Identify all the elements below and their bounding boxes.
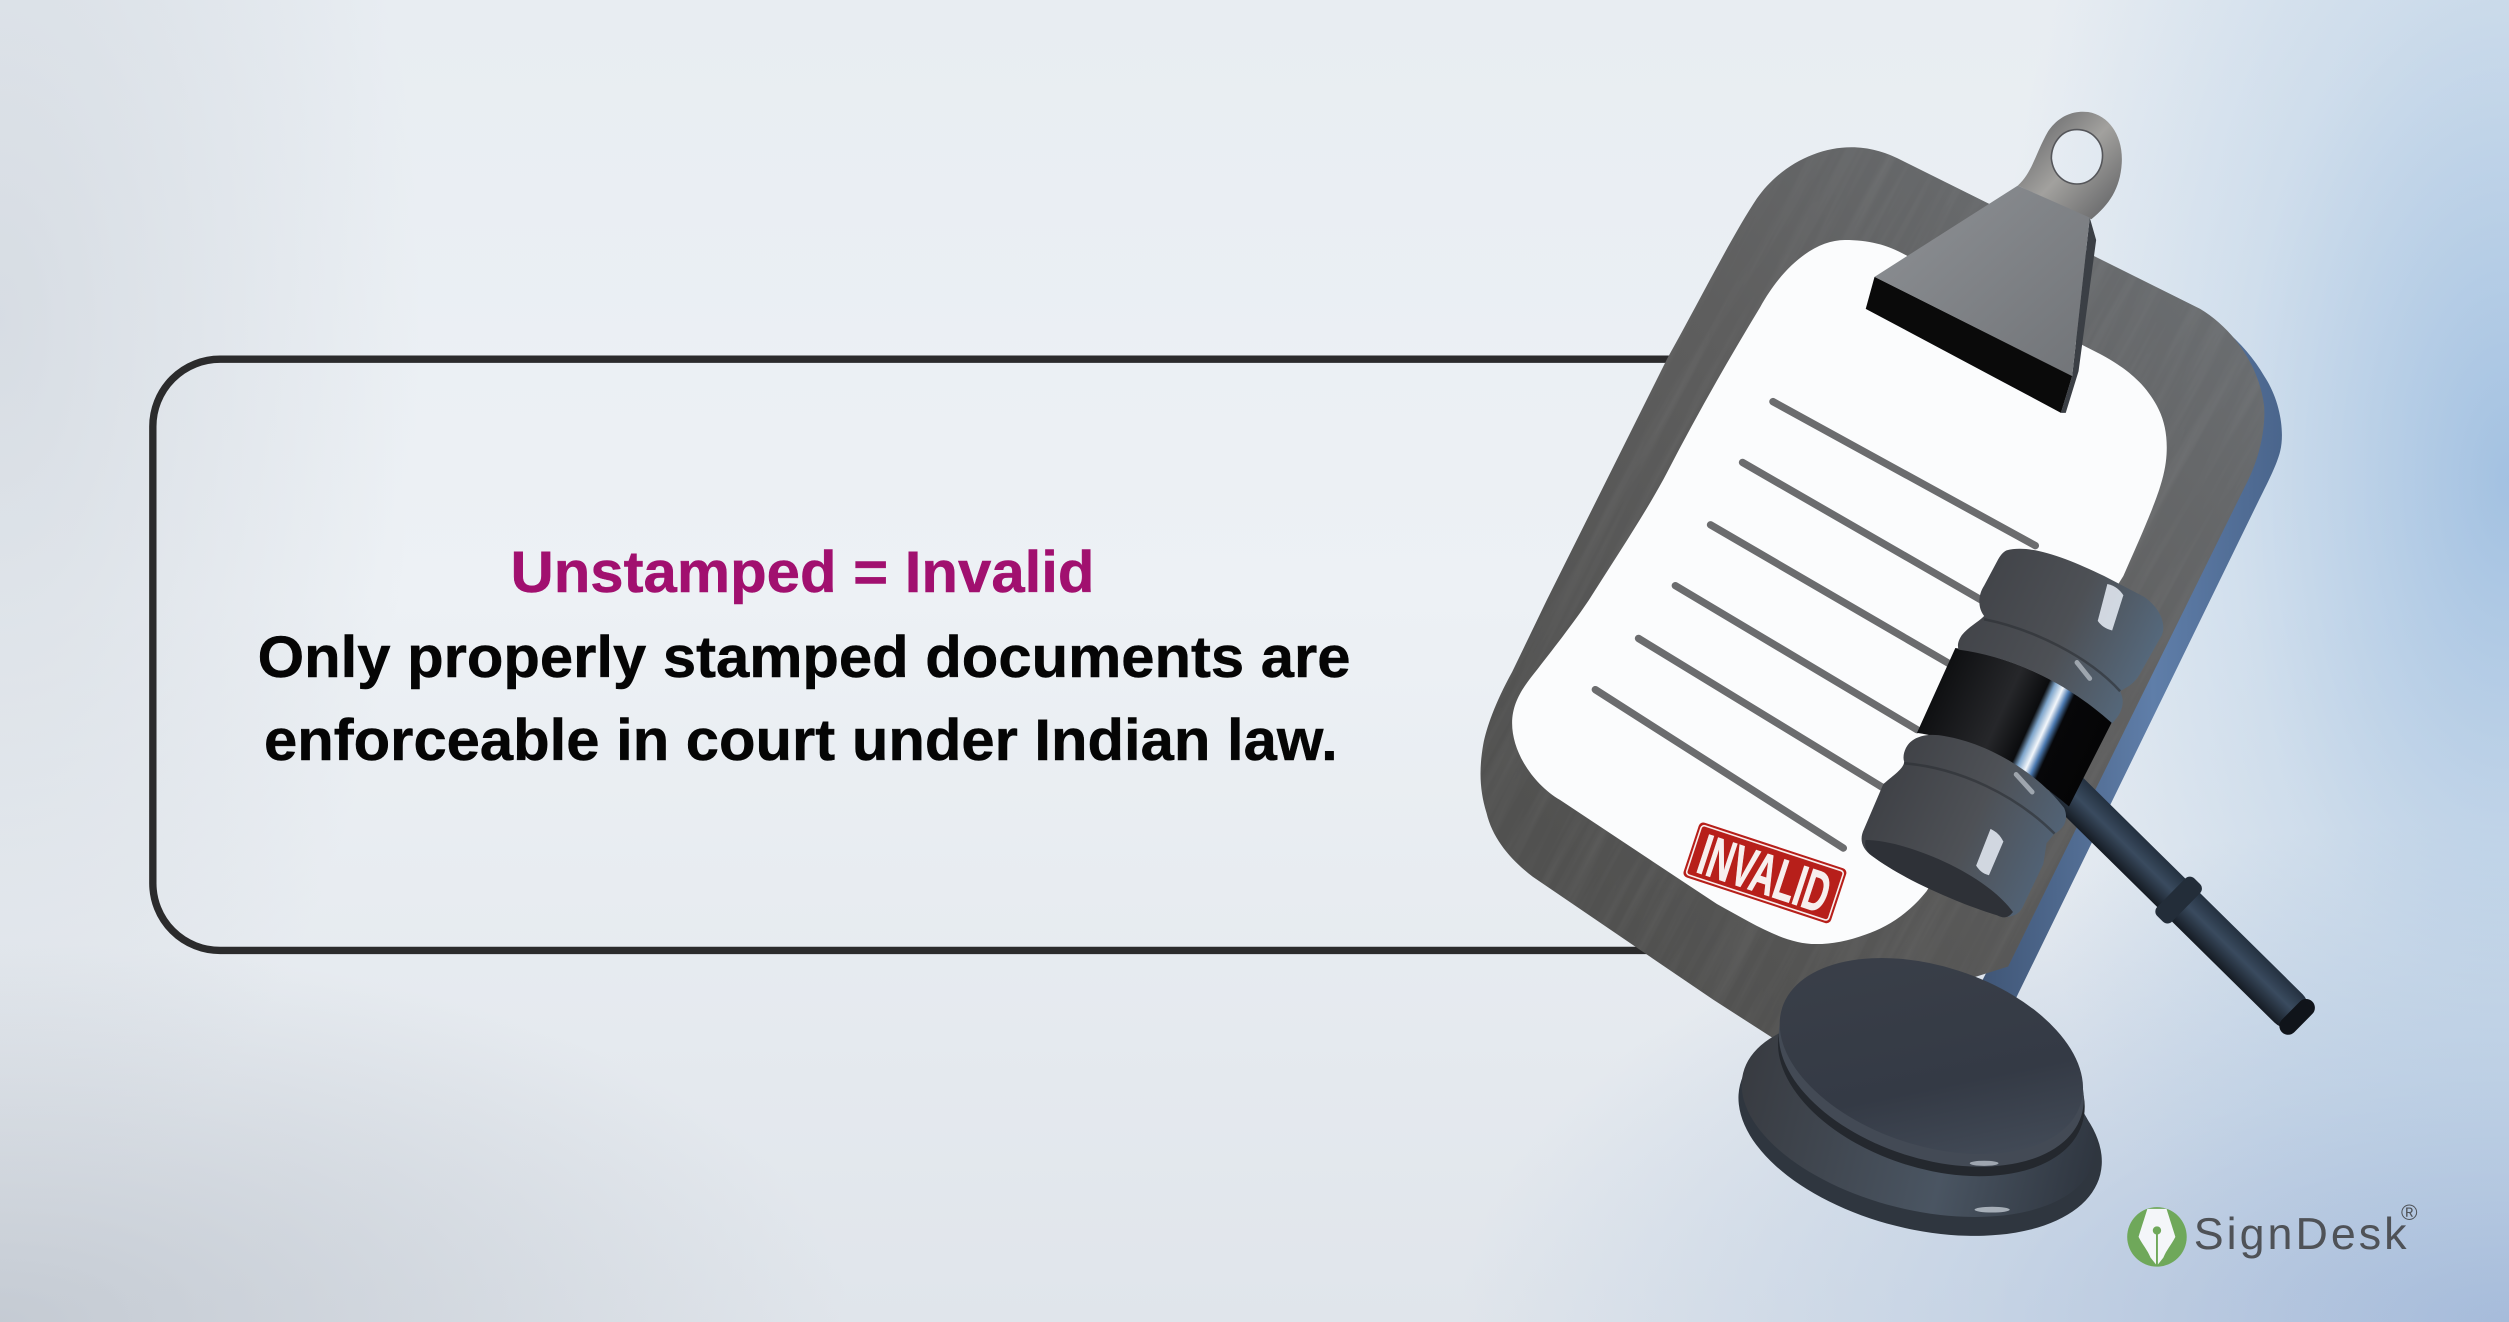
body line 1: Only properly stamped documents are [258, 625, 1351, 690]
gavel upper cap and ring [1958, 549, 2163, 723]
stamp: INVALID [1681, 820, 1848, 929]
gavel lower cap and ring [1862, 735, 2066, 917]
sound block disc shadow [1752, 938, 2111, 1212]
icon: sound block [1716, 922, 2124, 1271]
body line 2: enforceable in court under Indian law. [264, 708, 1338, 773]
logo mark [2127, 1207, 2187, 1267]
logo: SignDesk [2127, 1200, 2418, 1267]
infographic canvas [149, 112, 2418, 1267]
clip top face [1875, 186, 2090, 376]
gavel grooves [1904, 619, 2120, 834]
clip ring hole rim [2051, 130, 2103, 184]
logo wordmark: SignDesk [2194, 1209, 2407, 1259]
icon: gavel [1862, 549, 2322, 1042]
paper sheet [1512, 240, 2167, 944]
wood grain [1308, 0, 2452, 1210]
gavel highlights [1976, 584, 2123, 875]
document text lines [1595, 402, 2035, 848]
clip right edge [2061, 218, 2096, 413]
sound block disc top [1755, 922, 2108, 1190]
callout text [258, 540, 1351, 773]
clip ring handle [2018, 112, 2122, 219]
pen nib [2139, 1209, 2175, 1266]
sound block base [1716, 989, 2124, 1271]
clipboard blue side edge [1960, 290, 2282, 1024]
sound block highlights [1970, 1161, 2010, 1213]
clip front face [1866, 277, 2072, 413]
metal clip [1866, 112, 2122, 413]
heading: Unstamped = Invalid: Unstamped = Invalid [510, 540, 1094, 605]
gavel handle [2038, 760, 2322, 1042]
callout box outline [153, 359, 1913, 950]
gavel neck [1917, 648, 2112, 806]
icon: clipboard [1480, 112, 2282, 1038]
sound block disc edge [1753, 932, 2109, 1203]
gavel head [1862, 549, 2163, 917]
clipboard board [1481, 147, 2264, 1040]
stamp: INVALID: INVALID [1691, 823, 1838, 926]
registered mark: ® [2401, 1200, 2418, 1225]
gavel striking face [1865, 840, 2013, 917]
sound block base top [1721, 983, 2116, 1251]
